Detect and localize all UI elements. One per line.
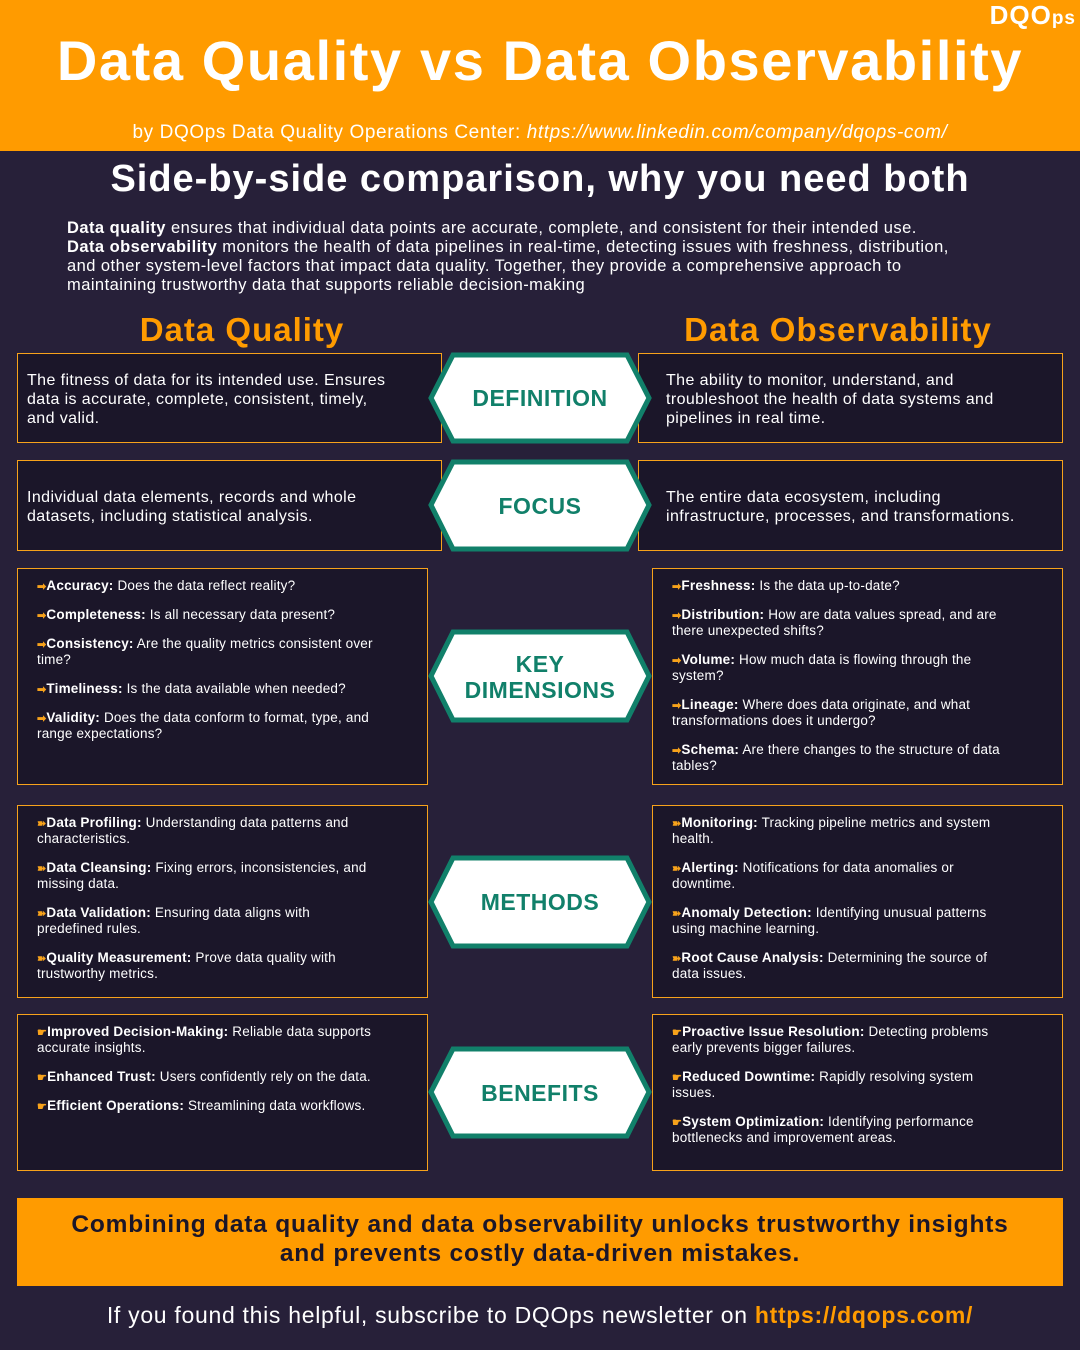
row3 right box: there unexpected shifts? [672,623,824,638]
title: Data Quality vs Data Observability [57,29,1023,92]
conclusion banner [17,1198,1063,1286]
row4 left box: ➽Data Validation: Ensuring data aligns with [37,905,310,920]
row3 left box: ➡Accuracy: Does the data reflect reality? [37,578,295,593]
column heading: data observability: Data Observability [684,311,992,348]
intro text: maintaining trustworthy data that supports reliable decision-making [67,276,585,294]
row1 left box: data is accurate, complete, consistent, timely, [27,391,367,408]
row3 right box [652,568,1063,785]
row3 left box: time? [37,652,71,667]
row4 right box: data issues. [672,966,746,981]
row4 left box: missing data. [37,876,119,891]
header [0,0,1080,151]
row5 right box: early prevents bigger failures. [672,1040,855,1055]
hexagon: focus [428,460,652,552]
intro text: and other system-level factors that impact data quality. Together, they provide a comprehensive approach to [67,257,901,275]
row1 left box: The fitness of data for its intended use. Ensures [27,372,385,389]
row4 right box [652,805,1063,998]
row5 left box: ☛Efficient Operations: Streamlining data workflows. [37,1098,365,1113]
hexagon: focus: FOCUS [498,493,582,519]
row2 left box: datasets, including statistical analysis. [27,508,313,525]
row3 left box: ➡Timeliness: Is the data available when needed? [37,681,346,696]
row3 right box: system? [672,668,724,683]
row4 right box: ➽Root Cause Analysis: Determining the source of [672,950,987,965]
hexagon: definition [428,352,652,444]
row2 right box: infrastructure, processes, and transformations. [666,508,1015,525]
row4 left box: ➽Data Cleansing: Fixing errors, inconsistencies, and [37,860,366,875]
row1 right box: troubleshoot the health of data systems and [666,391,994,408]
intro text: Data quality ensures that individual data points are accurate, complete, and consistent for their intended use. [67,219,917,237]
row3 left box: ➡Validity: Does the data conform to format, type, and [37,710,369,725]
row4 left box: ➽Quality Measurement: Prove data quality with [37,950,336,965]
row2 left box [17,460,442,551]
hexagon: methods [428,856,652,948]
row1 right box: pipelines in real time. [666,410,826,427]
row4 left box: characteristics. [37,831,130,846]
row4 left box: ➽Data Profiling: Understanding data patterns and [37,815,348,830]
row3 right box: tables? [672,758,717,773]
row4 right box: ➽Monitoring: Tracking pipeline metrics and system [672,815,990,830]
hexagon: benefits [428,1046,652,1138]
row5 right box: ☛Reduced Downtime: Rapidly resolving system [672,1069,973,1084]
row4 right box: using machine learning. [672,921,819,936]
logo: DQOps [990,0,1076,30]
row5 left box: ☛Enhanced Trust: Users confidently rely on the data. [37,1069,371,1084]
row5 right box: ☛Proactive Issue Resolution: Detecting problems [672,1024,988,1039]
intro text: Data observability monitors the health of data pipelines in real-time, detecting issues with freshness, distribution, [67,238,949,256]
row5 right box: bottlenecks and improvement areas. [672,1130,896,1145]
row5 left box [17,1014,428,1171]
row4 right box: ➽Alerting: Notifications for data anomalies or [672,860,954,875]
hexagon: key dimensions [428,630,652,722]
row2 right box [638,460,1063,551]
row2 right box: The entire data ecosystem, including [666,489,941,506]
row3 right box: ➡Distribution: How are data values spread, and are [672,607,997,622]
row5 right box: issues. [672,1085,715,1100]
footer cta: If you found this helpful, subscribe to DQOps newsletter on https://dqops.com/ [107,1302,973,1328]
row5 right box [652,1014,1063,1171]
heading: Side-by-side comparison, why you need both [110,158,970,200]
row3 right box: ➡Volume: How much data is flowing through the [672,652,971,667]
row4 left box: trustworthy metrics. [37,966,158,981]
hexagon: benefits: BENEFITS [481,1080,599,1106]
hexagon: methods: METHODS [481,889,599,915]
row4 left box: predefined rules. [37,921,141,936]
row1 left box [17,353,442,443]
row3 left box: ➡Consistency: Are the quality metrics consistent over [37,636,373,651]
row4 left box [17,805,428,998]
row3 left box: range expectations? [37,726,162,741]
row3 right box: transformations does it undergo? [672,713,876,728]
row3 left box [17,568,428,785]
intro text [67,219,949,294]
conclusion banner: and prevents costly data-driven mistakes. [280,1240,800,1267]
hexagon: definition: DEFINITION [472,385,608,411]
row4 right box: downtime. [672,876,735,891]
row5 left box: accurate insights. [37,1040,146,1055]
row4 right box: ➽Anomaly Detection: Identifying unusual patterns [672,905,986,920]
column heading: data quality: Data Quality [140,311,344,348]
row2 left box: Individual data elements, records and whole [27,489,356,506]
hexagon: key dimensions: KEY [516,651,564,677]
row1 right box [638,353,1063,443]
hexagon: key dimensions: DIMENSIONS [465,677,615,703]
row3 right box: ➡Lineage: Where does data originate, and what [672,697,970,712]
row3 right box: ➡Schema: Are there changes to the structure of data [672,742,1000,757]
conclusion banner: Combining data quality and data observability unlocks trustworthy insights [71,1211,1009,1238]
row5 left box: ☛Improved Decision-Making: Reliable data supports [37,1024,371,1039]
row1 right box: The ability to monitor, understand, and [666,372,954,389]
row5 right box: ☛System Optimization: Identifying performance [672,1114,974,1129]
row1 left box: and valid. [27,410,100,427]
row3 left box: ➡Completeness: Is all necessary data present? [37,607,335,622]
subtitle: by DQOps Data Quality Operations Center: https://www.linkedin.com/company/dqops-com/ [133,122,947,143]
row4 right box: health. [672,831,714,846]
row3 right box: ➡Freshness: Is the data up-to-date? [672,578,900,593]
